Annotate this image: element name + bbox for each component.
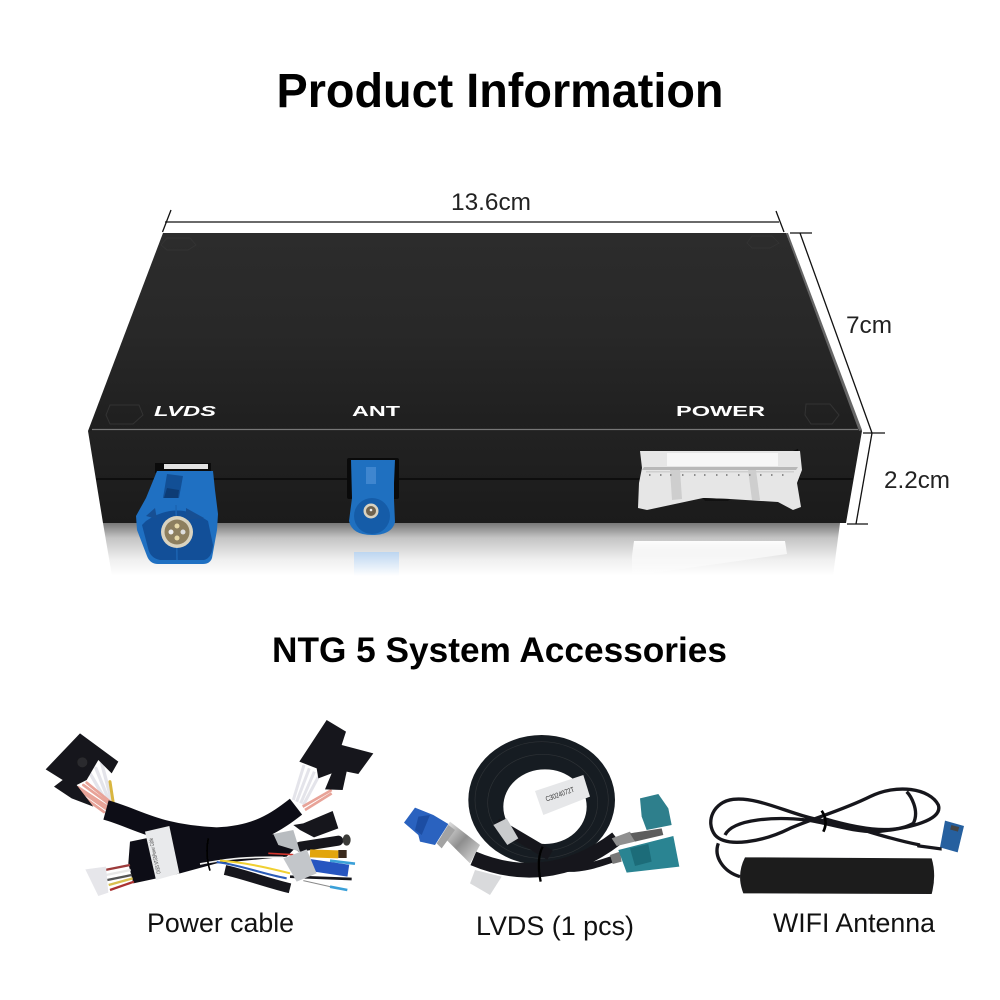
metal sleeve — [442, 822, 480, 863]
blue plug — [404, 808, 448, 845]
main sleeve — [106, 807, 296, 837]
cable tie — [207, 838, 210, 871]
cable tie — [822, 811, 826, 832]
accessory: power cable harness: CKBS NTG5Power Cable — [149, 837, 163, 874]
left black connector — [46, 733, 118, 807]
lower label — [470, 870, 502, 895]
dimension: height 2.2cm — [847, 433, 950, 524]
accessory: LVDS cable: C3024072T — [544, 785, 576, 804]
right black connector — [299, 720, 373, 790]
colored wires — [200, 853, 355, 890]
coil highlights — [475, 742, 608, 858]
ANT blue connector — [347, 458, 399, 535]
teal plug upper — [640, 794, 672, 830]
caption: power cable: Power cable — [147, 908, 294, 938]
cable tie — [539, 847, 543, 882]
top face — [88, 233, 862, 431]
silver band — [493, 818, 518, 845]
white plug — [85, 867, 108, 896]
reflection of power connector — [632, 541, 787, 576]
port label: ANT: ANT — [352, 403, 400, 420]
left wires — [78, 763, 113, 812]
highlight edge — [92, 428, 858, 430]
caption: LVDS: LVDS (1 pcs) — [476, 911, 634, 941]
dimension: width 13.6cm: 13.6cm — [451, 189, 531, 216]
teal plug lower — [618, 836, 679, 873]
front face — [88, 431, 862, 523]
POWER white connector — [638, 449, 802, 510]
reflection of ant connector — [354, 552, 399, 576]
antenna body — [740, 857, 934, 894]
lower black plugs — [225, 870, 290, 888]
right bevel — [786, 233, 862, 431]
usb and audio plugs — [293, 811, 338, 837]
right wires — [293, 765, 332, 810]
hexagon corner marks — [106, 236, 839, 424]
dimension: height 2.2cm: 2.2cm — [884, 467, 950, 494]
metal ferrules — [612, 832, 635, 846]
lower cable run — [473, 838, 617, 870]
white label — [145, 826, 179, 880]
white label — [535, 775, 590, 815]
port label: POWER: POWER — [676, 403, 765, 420]
dimension: width 13.6cm — [162, 189, 784, 232]
port label: LVDS: LVDS — [154, 403, 216, 420]
accessory: power cable harness — [46, 720, 373, 896]
cable coil — [468, 735, 615, 865]
antenna cable — [711, 789, 939, 877]
fakra plug — [940, 821, 964, 852]
accessory: LVDS cable — [404, 735, 679, 895]
caption: WIFI antenna: WIFI Antenna — [773, 908, 936, 938]
seam — [96, 478, 853, 480]
reflection shadow under box — [103, 523, 840, 576]
accessory: WIFI antenna — [711, 789, 964, 894]
central bundle mass — [128, 830, 297, 883]
dimension: depth 7cm — [790, 233, 892, 433]
title: Product Information — [276, 65, 724, 118]
dimension: depth 7cm: 7cm — [846, 312, 892, 339]
multicolor wires to white plug — [105, 865, 134, 890]
silver tags — [273, 830, 300, 852]
LVDS blue connector — [136, 463, 218, 564]
product: black box — [88, 233, 862, 576]
heading: accessories: NTG 5 System Accessories — [272, 631, 727, 670]
rca plugs — [310, 853, 338, 854]
